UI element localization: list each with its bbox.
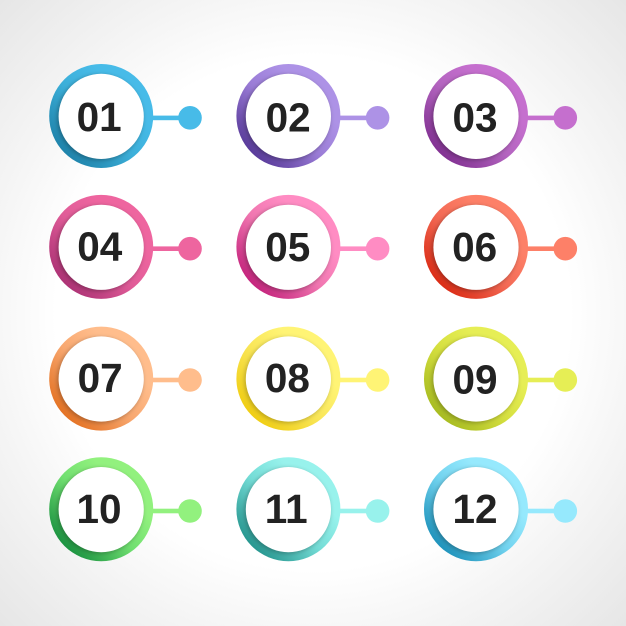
- badge 04: 04: [77, 223, 123, 269]
- badge 07: 07: [78, 355, 123, 401]
- badge 08: 08: [265, 355, 310, 401]
- badge 12: 12: [452, 486, 498, 532]
- badge 06: [424, 195, 577, 299]
- badge 10: [49, 457, 202, 561]
- badge 03: 03: [452, 95, 498, 141]
- badge 07: [49, 327, 202, 431]
- badge 10: 10: [76, 486, 122, 532]
- badge 09: 09: [452, 357, 498, 403]
- badge 12: [424, 457, 577, 561]
- badge 03: [424, 64, 577, 168]
- badge 01: [49, 64, 202, 168]
- badge 05: [236, 195, 389, 299]
- badge 09: [424, 327, 577, 431]
- badge 11: [236, 457, 389, 561]
- badge 02: [236, 64, 389, 168]
- badge 06: 06: [452, 224, 497, 270]
- badge 01: 01: [77, 94, 122, 140]
- badge 04: [49, 195, 202, 299]
- badge 08: [236, 327, 389, 431]
- badge 05: 05: [265, 224, 310, 270]
- badge 02: 02: [266, 95, 311, 141]
- badge 11: 11: [265, 486, 308, 532]
